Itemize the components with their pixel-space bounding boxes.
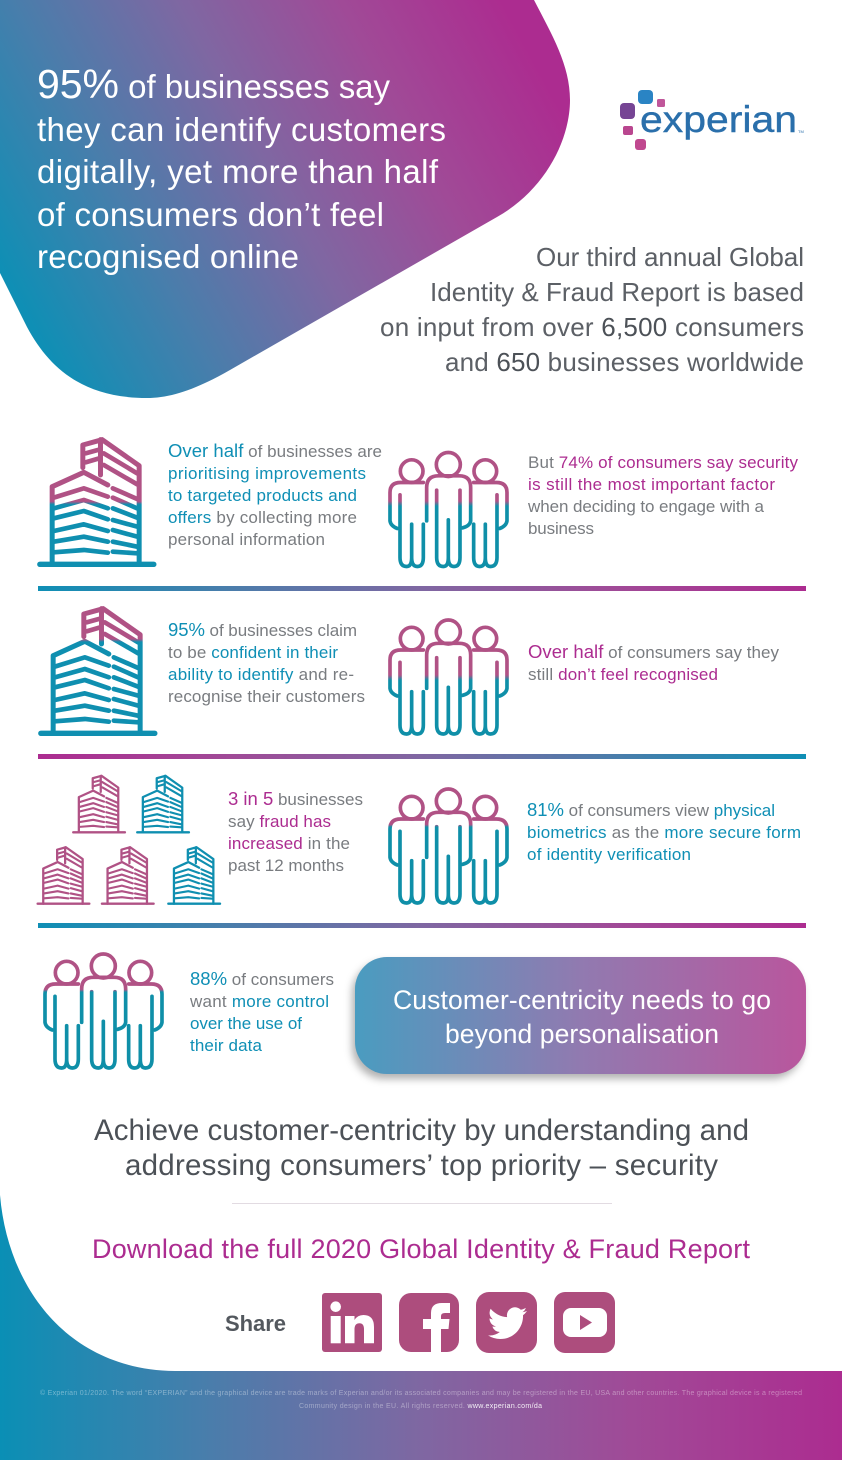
text: over half of businesses: personal information [168, 530, 325, 549]
text: 3 in 5 businesses [228, 788, 363, 875]
text: 81% of consumers: of identity verification [527, 845, 691, 864]
intro paragraph [380, 242, 804, 377]
text: 74% of consumers: business [528, 519, 594, 538]
text: 74% of consumers [527, 453, 798, 538]
hero headline: of consumers don’t feel [37, 196, 384, 233]
icon: five buildings, 3 in 5 [38, 776, 220, 904]
text: 3 in 5 businesses: past 12 months [228, 856, 344, 875]
Experian logo: experian [640, 99, 797, 140]
text: 74% of consumers: But 74% of consumers say security [528, 453, 798, 472]
icon: people, row 4 [45, 954, 162, 1068]
conclusion heading: Achieve customer-centricity by understanding and [94, 1114, 749, 1147]
icon: people, row 2 [390, 620, 507, 734]
text: over half of businesses: offers by collecting more [168, 508, 357, 527]
hero headline: 95% of businesses say [37, 61, 390, 107]
share label: Share [225, 1311, 286, 1336]
icon: Facebook [399, 1293, 459, 1352]
intro paragraph: and 650 businesses worldwide [445, 347, 804, 377]
text: 3 in 5 businesses: say fraud has [228, 812, 331, 831]
text: over half of consumers: Over half of consumers say they [528, 641, 780, 662]
text: 95% of businesses claim: 95% of businesses claim [168, 619, 357, 640]
text: 95% of businesses claim: ability to identify and re- [168, 665, 354, 684]
text: 88% of consumers: their data [190, 1036, 263, 1055]
icon: building, row 1 [40, 440, 154, 564]
text: 88% of consumers: want more control [189, 992, 329, 1011]
icon: YouTube [554, 1292, 615, 1353]
legal text: Community design in the EU. All rights reserved. www.experian.com/da [299, 1403, 542, 1410]
Experian logo [620, 90, 804, 150]
legal text [40, 1389, 802, 1410]
text: over half of consumers [528, 641, 780, 684]
hero headline: they can identify customers [37, 111, 446, 148]
text: 88% of consumers [189, 968, 334, 1055]
text: 95% of businesses claim: to be confident in their [168, 643, 338, 662]
text: 81% of consumers: 81% of consumers view physical [527, 799, 775, 820]
text: 81% of consumers [527, 799, 801, 864]
hero blob panel [0, 0, 570, 398]
icon: people, row 3 [390, 789, 507, 903]
text: 74% of consumers: when deciding to engage with a [527, 497, 765, 516]
hero headline: recognised online [37, 238, 299, 275]
text: 81% of consumers: biometrics as the more secure form [527, 823, 801, 842]
text: over half of consumers: still don’t feel recognised [528, 665, 718, 684]
download link: Download the full 2020 Global Identity & Fraud Report [92, 1234, 750, 1264]
icon: Twitter [476, 1292, 537, 1353]
hero headline: digitally, yet more than half [37, 153, 439, 190]
text: over half of businesses [168, 440, 382, 549]
conclusion heading [94, 1114, 749, 1182]
text: 88% of consumers: 88% of consumers [190, 968, 334, 989]
icon: building, row 2 [41, 609, 155, 733]
footer band [0, 1195, 842, 1460]
text: over half of businesses: prioritising improvements [168, 464, 366, 483]
callout: customer-centricity [355, 957, 806, 1074]
conclusion heading: addressing consumers’ top priority – security [125, 1149, 718, 1182]
intro paragraph: on input from over 6,500 consumers [380, 312, 804, 342]
text: 95% of businesses claim: recognise their customers [168, 687, 365, 706]
intro paragraph: Identity & Fraud Report is based [430, 277, 804, 307]
icon: people, row 1 [390, 452, 507, 566]
callout: customer-centricity: Customer-centricity needs to go [393, 985, 771, 1015]
text: 88% of consumers: over the use of [190, 1014, 302, 1033]
icon: LinkedIn [322, 1293, 382, 1352]
Experian logo: TM [798, 129, 804, 134]
text: over half of businesses: Over half of businesses are [168, 440, 382, 461]
text: 95% of businesses claim [168, 619, 365, 706]
text: 3 in 5 businesses: increased in the [228, 834, 350, 853]
callout: customer-centricity: beyond personalisation [445, 1019, 719, 1049]
text: 74% of consumers: is still the most important factor [528, 475, 775, 494]
hero headline [37, 61, 446, 275]
text: over half of businesses: to targeted products and [168, 486, 357, 505]
intro paragraph: Our third annual Global [536, 242, 804, 272]
legal text: © Experian 01/2020. The word “EXPERIAN” and the graphical device are trade marks of Experian and/or its associated companies and may be registered in the EU, USA and other countries. The graphical device is a registered [40, 1389, 802, 1397]
text: 3 in 5 businesses: 3 in 5 businesses [228, 788, 363, 809]
